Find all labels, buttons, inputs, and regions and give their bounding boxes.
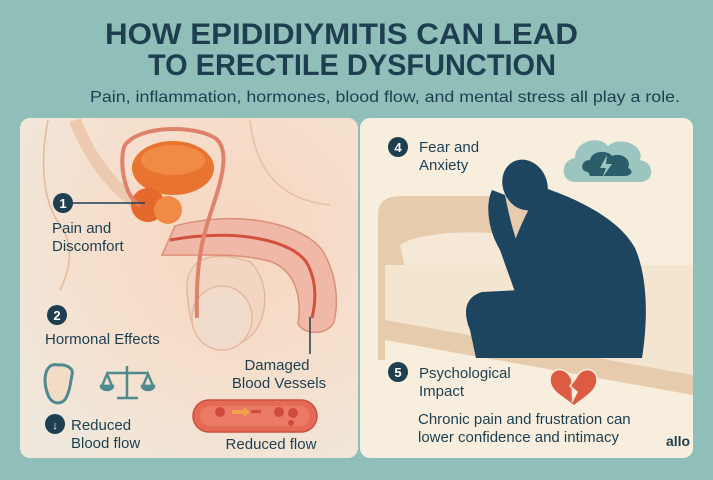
- icon: scales: [101, 366, 154, 398]
- bladder: [132, 141, 214, 195]
- title: [105, 18, 578, 82]
- title: TO ERECTILE DYSFUNCTION: [148, 49, 556, 82]
- prostate: [131, 188, 165, 222]
- callout 2: Hormonal Effects: [45, 331, 160, 348]
- damaged blood vessels label: [232, 317, 326, 392]
- icon: broken heart: [550, 370, 597, 406]
- callout 4: 4: [394, 140, 402, 155]
- callout 5: Impact: [419, 383, 465, 400]
- callout 2: [45, 305, 160, 348]
- scrotum: [187, 256, 265, 345]
- penis shaft: [162, 219, 336, 332]
- callout 5: Chronic pain and frustration can: [418, 411, 631, 428]
- reduced blood flow: [45, 414, 140, 452]
- callout 1: Pain and: [52, 220, 111, 237]
- callout 5: 5: [394, 365, 402, 380]
- blood vessel illustration: Reduced flow: [226, 436, 317, 453]
- callout 4: Fear and: [419, 139, 479, 156]
- damaged blood vessels label: Blood Vessels: [232, 375, 326, 392]
- callout 1: 1: [59, 196, 67, 211]
- callout 5: [388, 362, 631, 446]
- callout 4: Anxiety: [419, 157, 469, 174]
- callout 5: Psychological: [419, 365, 511, 382]
- damaged blood vessels label: Damaged: [244, 357, 310, 374]
- vas deferens loop: [122, 129, 224, 318]
- man silhouette: [466, 152, 646, 358]
- icon: kidney: [45, 365, 72, 403]
- callout 1: Discomfort: [52, 238, 125, 255]
- reduced blood flow: ↓: [52, 420, 58, 432]
- subtitle: Pain, inflammation, hormones, blood flow, and mental stress all play a role.: [90, 89, 680, 106]
- blood vessel illustration: [193, 400, 317, 453]
- callout 2: 2: [53, 308, 61, 323]
- reduced blood flow: Blood flow: [71, 435, 140, 452]
- reduced blood flow: Reduced: [71, 417, 131, 434]
- logo: allo: allo: [666, 433, 690, 449]
- title: HOW EPIDIDIYMITIS CAN LEAD: [105, 18, 578, 51]
- testis: [192, 286, 252, 350]
- body outline: [44, 120, 69, 290]
- icon: storm cloud: [564, 140, 651, 182]
- callout 5: lower confidence and intimacy: [418, 429, 619, 446]
- callout 4: [388, 137, 479, 174]
- panel: psychological: [360, 118, 693, 458]
- panel: anatomy: [20, 118, 358, 458]
- bed: [378, 196, 693, 458]
- callout 1: [52, 193, 145, 255]
